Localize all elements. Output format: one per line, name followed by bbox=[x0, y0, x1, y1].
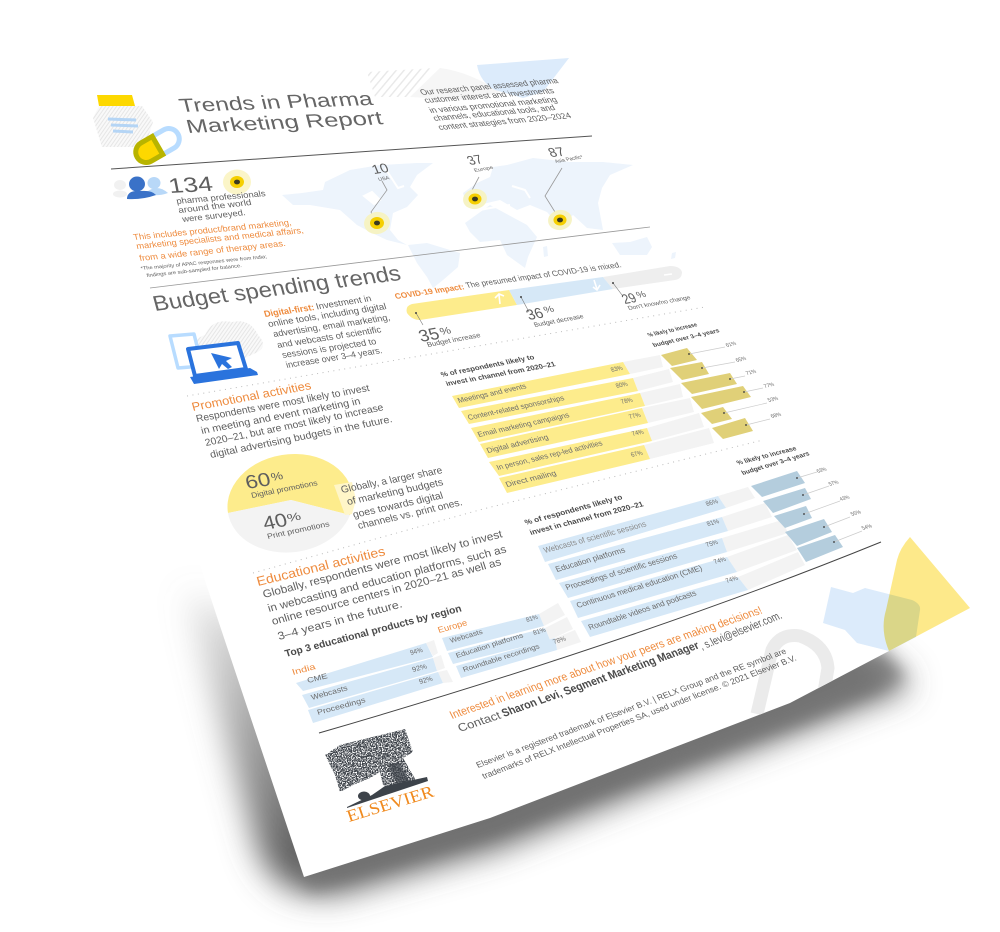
bar labels: Continuous medical education (CME) bbox=[575, 564, 704, 610]
bar labels: Content-related sponsorships bbox=[466, 393, 566, 422]
bars bbox=[661, 348, 753, 439]
bar values: 74% bbox=[713, 556, 728, 566]
bar labels: Webcasts of scientific sessions bbox=[542, 520, 648, 555]
value: 36 percent: % bbox=[542, 304, 556, 315]
pie chart: 60 bbox=[243, 470, 273, 494]
text: globally larger share bbox=[340, 465, 464, 532]
call to action: Sharon Levi, Segment Marketing Manager bbox=[500, 640, 702, 720]
stat: 134 respondents: 134 bbox=[167, 173, 215, 198]
Europe table: Education platforms bbox=[455, 632, 525, 660]
chart: promotional channels bbox=[440, 353, 714, 493]
title bbox=[177, 89, 386, 138]
panel: COVID-19 impact: The presumed impact of COVID-19 is mixed. bbox=[464, 261, 623, 290]
bar labels: Digital advertising bbox=[485, 433, 550, 455]
icon: yellow dot bbox=[223, 170, 251, 194]
value: 36 percent: Budget decrease bbox=[533, 313, 585, 329]
Europe table: 81% bbox=[532, 627, 547, 637]
bar labels: Direct mailing bbox=[504, 469, 558, 489]
text: educational activities: Educational activities bbox=[255, 543, 387, 589]
gray tracks bbox=[623, 355, 714, 459]
text: educational activities: in webcasting and education platforms, such as bbox=[266, 543, 508, 615]
value: 29 percent: Don't know/no change bbox=[627, 294, 693, 312]
text: educational activities bbox=[255, 528, 508, 643]
bar values: 80% bbox=[615, 381, 629, 390]
text: globally larger share: of marketing budgets bbox=[346, 477, 445, 508]
text: promotional activities: Promotional activities bbox=[190, 378, 313, 414]
panel: COVID-19 impact: COVID-19 Impact: bbox=[393, 282, 466, 301]
text: digital-first: Investment in bbox=[315, 293, 373, 311]
values: 68% bbox=[770, 412, 783, 420]
values bbox=[725, 341, 783, 420]
pin: USA: USA bbox=[377, 175, 391, 183]
orange note: marketing specialists and medical affairs, bbox=[135, 225, 304, 251]
bar labels: Education platforms bbox=[554, 546, 627, 574]
values: 77% bbox=[763, 382, 776, 390]
map pins bbox=[362, 145, 585, 236]
text: promotional activities bbox=[190, 378, 394, 461]
bar labels: Email marketing campaigns bbox=[476, 411, 571, 439]
leader lines bbox=[797, 472, 862, 542]
Europe table: Webcasts bbox=[449, 629, 484, 645]
pie chart bbox=[227, 454, 356, 553]
India table: Proceedings bbox=[316, 695, 367, 717]
chart: promotional budget increase bbox=[646, 322, 783, 439]
text: digital-first: Digital-first: bbox=[263, 302, 316, 319]
values: 55% bbox=[850, 510, 863, 518]
value: 29 percent: % bbox=[634, 289, 648, 300]
intro paragraph: in various promotional marketing bbox=[427, 95, 559, 115]
stat: 134 respondents bbox=[167, 170, 267, 224]
chart header: budget over 3–4 years bbox=[651, 327, 722, 349]
values: 54% bbox=[861, 524, 874, 532]
pin: Asia Pacific bbox=[545, 145, 585, 232]
blue bars bbox=[538, 496, 748, 637]
value: 35 percent: 35 bbox=[415, 323, 442, 346]
chart header: budget over 3–4 years bbox=[740, 451, 811, 477]
legal text: trademarks of RELX Intellectual Properties SA, used under license. © 2021 Elsevier B.V. bbox=[480, 653, 798, 781]
values: 71% bbox=[745, 369, 758, 377]
dots bbox=[688, 353, 747, 426]
bar values: 83% bbox=[610, 365, 624, 374]
Europe table bbox=[436, 603, 581, 678]
chart: top 3 educational products by region: Top 3 educational products by region bbox=[284, 603, 463, 660]
text: promotional activities: Respondents were most likely to invest bbox=[195, 383, 371, 425]
stat: 134 respondents: around the world bbox=[177, 197, 253, 215]
India table bbox=[291, 640, 453, 723]
bars bbox=[751, 471, 843, 562]
heading: budget spending trends: Budget spending trends bbox=[150, 260, 404, 316]
intro paragraph: channels, educational tools, and bbox=[431, 103, 557, 123]
call to action: , s.levi@elsevier.com. bbox=[698, 610, 784, 653]
text: digital-first: advertising, email marketing, bbox=[272, 312, 391, 339]
Europe table: 78% bbox=[552, 636, 567, 646]
pin: Asia Pacific: 87 bbox=[545, 145, 567, 160]
stacked bar bbox=[407, 266, 682, 320]
decoration: bottom right shapes bbox=[757, 537, 970, 714]
value: 35 percent bbox=[415, 312, 482, 349]
gray tracks bbox=[718, 487, 805, 590]
text: digital-first: online tools, including digital bbox=[267, 301, 388, 329]
water gaps bbox=[364, 168, 565, 235]
pin: USA: 10 bbox=[369, 161, 391, 177]
bar labels: Roundtable videos and podcasts bbox=[587, 589, 698, 632]
pie chart: % bbox=[270, 470, 285, 484]
call to action: Contact bbox=[456, 710, 504, 735]
values: 63% bbox=[816, 467, 828, 475]
pin: Asia Pacific: Asia Pacific* bbox=[554, 155, 585, 165]
icon: document and pill bbox=[93, 95, 183, 166]
bar values: 77% bbox=[628, 412, 642, 421]
bar labels bbox=[542, 520, 704, 632]
pie chart: % bbox=[286, 511, 303, 525]
bar values: 67% bbox=[630, 450, 644, 459]
bar labels: Proceedings of scientific sessions bbox=[564, 552, 679, 592]
text: globally larger share: channels vs. print ones. bbox=[356, 497, 464, 532]
bar values: 74% bbox=[631, 429, 645, 438]
text: educational activities: online resource centers in 2020–21 as well as bbox=[270, 556, 503, 628]
chart: educational channels bbox=[523, 487, 805, 637]
bar values: 75% bbox=[705, 539, 720, 549]
stat: 134 respondents: were surveyed. bbox=[180, 207, 247, 224]
legal text: Elsevier is a registered trademark of Elsevier B.V. | RELX Group and the RE symbol are bbox=[474, 646, 788, 770]
orange note: from a wide range of therapy areas. bbox=[138, 238, 287, 263]
bar values: 81% bbox=[706, 518, 721, 528]
India table: India bbox=[291, 661, 317, 677]
Elsevier logo: ELSEVIER bbox=[344, 782, 437, 826]
text: promotional activities: 2020–21, but are most likely to increase bbox=[204, 402, 385, 449]
dots bbox=[796, 477, 835, 543]
text: digital-first: increase over 3–4 years. bbox=[285, 345, 383, 370]
India table: 94% bbox=[409, 647, 424, 657]
title: Marketing Report bbox=[184, 108, 386, 138]
India table: 92% bbox=[418, 676, 434, 686]
orange note bbox=[132, 217, 304, 263]
values: 65% bbox=[735, 356, 748, 364]
Europe table: Roundtable recordings bbox=[462, 643, 541, 674]
values: 53% bbox=[767, 396, 780, 404]
pin: USA bbox=[362, 161, 392, 236]
value: 36 percent: 36 bbox=[524, 305, 546, 324]
India table: CME bbox=[306, 671, 329, 685]
text: educational activities: 3–4 years in the future. bbox=[276, 598, 404, 643]
intro paragraph: customer interest and investments bbox=[422, 86, 556, 105]
value: 29 percent: 29 bbox=[619, 291, 640, 308]
chart: top 3 educational products by region bbox=[284, 603, 581, 723]
text: digital-first: and webcasts of scientific bbox=[276, 324, 383, 350]
values: 61% bbox=[725, 341, 738, 349]
chart header: % of respondents likely to bbox=[523, 493, 624, 527]
title: Trends in Pharma bbox=[177, 89, 375, 117]
value: 29 percent bbox=[612, 282, 693, 312]
value: 35 percent: % bbox=[438, 326, 453, 338]
value: 35 percent: Budget increase bbox=[426, 332, 482, 349]
continents bbox=[282, 158, 676, 288]
intro paragraph: Our research panel assessed pharma bbox=[418, 76, 560, 97]
bar values: 86% bbox=[705, 498, 720, 508]
pin: Europe bbox=[461, 152, 495, 211]
India table: Webcasts bbox=[310, 683, 349, 702]
intro paragraph bbox=[418, 76, 573, 132]
bar values bbox=[705, 498, 740, 585]
text: digital-first: sessions is projected to bbox=[281, 336, 378, 360]
text: digital-first bbox=[263, 293, 391, 370]
page shadow bbox=[185, 590, 912, 894]
bar values bbox=[610, 365, 645, 459]
pin: Europe: 37 bbox=[464, 152, 485, 168]
white page sheet bbox=[100, 57, 970, 877]
Europe table: Europe bbox=[436, 617, 469, 635]
bar values: 78% bbox=[620, 397, 634, 406]
stat: 134 respondents: pharma professionals bbox=[175, 188, 267, 206]
footnote: *The majority of APAC responses were from India; bbox=[140, 254, 268, 272]
chart header: % of respondents likely to bbox=[440, 353, 536, 379]
text: promotional activities: digital advertising budgets in the future. bbox=[209, 414, 394, 461]
chart: educational budget increase bbox=[736, 445, 874, 562]
Europe table: 81% bbox=[525, 614, 539, 624]
footnote: findings are sub-sampled for balance. bbox=[146, 263, 242, 279]
chart header bbox=[646, 322, 722, 349]
call to action: Interested in learning more about how your peers are making decisions! bbox=[448, 605, 764, 722]
icon: laptop and tablet bbox=[170, 321, 263, 384]
text: educational activities: Globally, respondents were most likely to invest bbox=[261, 528, 504, 601]
pin: Europe: Europe bbox=[473, 165, 495, 174]
India table: 92% bbox=[411, 663, 428, 674]
icon: people bbox=[113, 176, 168, 199]
world map bbox=[282, 158, 676, 288]
icon: tree bbox=[325, 729, 428, 808]
values bbox=[816, 467, 874, 532]
background decoration: top blobs bbox=[367, 58, 569, 100]
chart header: invest in channel from 2020–21 bbox=[528, 500, 645, 537]
text: promotional activities: in meeting and event marketing in bbox=[200, 396, 362, 437]
text: globally larger share: goes towards digital bbox=[351, 490, 445, 521]
chart header: invest in channel from 2020–21 bbox=[445, 360, 557, 388]
chart header: % likely to increase bbox=[736, 445, 798, 467]
chart header: % likely to increase bbox=[646, 322, 699, 339]
panel: COVID-19 impact bbox=[393, 261, 693, 349]
intro paragraph: content strategies from 2020–2024 bbox=[436, 111, 573, 132]
text: globally larger share: Globally, a larger share bbox=[340, 465, 444, 496]
pie chart: Digital promotions bbox=[250, 478, 319, 500]
bar labels: In person, sales rep-led activities bbox=[495, 439, 604, 472]
pie chart: 40 bbox=[261, 510, 290, 535]
values: 43% bbox=[839, 495, 851, 503]
footnote bbox=[140, 254, 268, 279]
bar values: 74% bbox=[725, 575, 740, 585]
chart header bbox=[440, 353, 557, 388]
orange note: This includes product/brand marketing, bbox=[132, 217, 292, 242]
Elsevier logo bbox=[325, 729, 437, 826]
bar labels bbox=[456, 382, 604, 489]
value: 36 percent bbox=[520, 296, 585, 329]
yellow bars bbox=[452, 362, 652, 493]
values: 57% bbox=[828, 480, 840, 488]
pie chart: Print promotions bbox=[266, 519, 331, 541]
bar labels: Meetings and events bbox=[456, 382, 528, 405]
leader lines bbox=[689, 347, 770, 425]
